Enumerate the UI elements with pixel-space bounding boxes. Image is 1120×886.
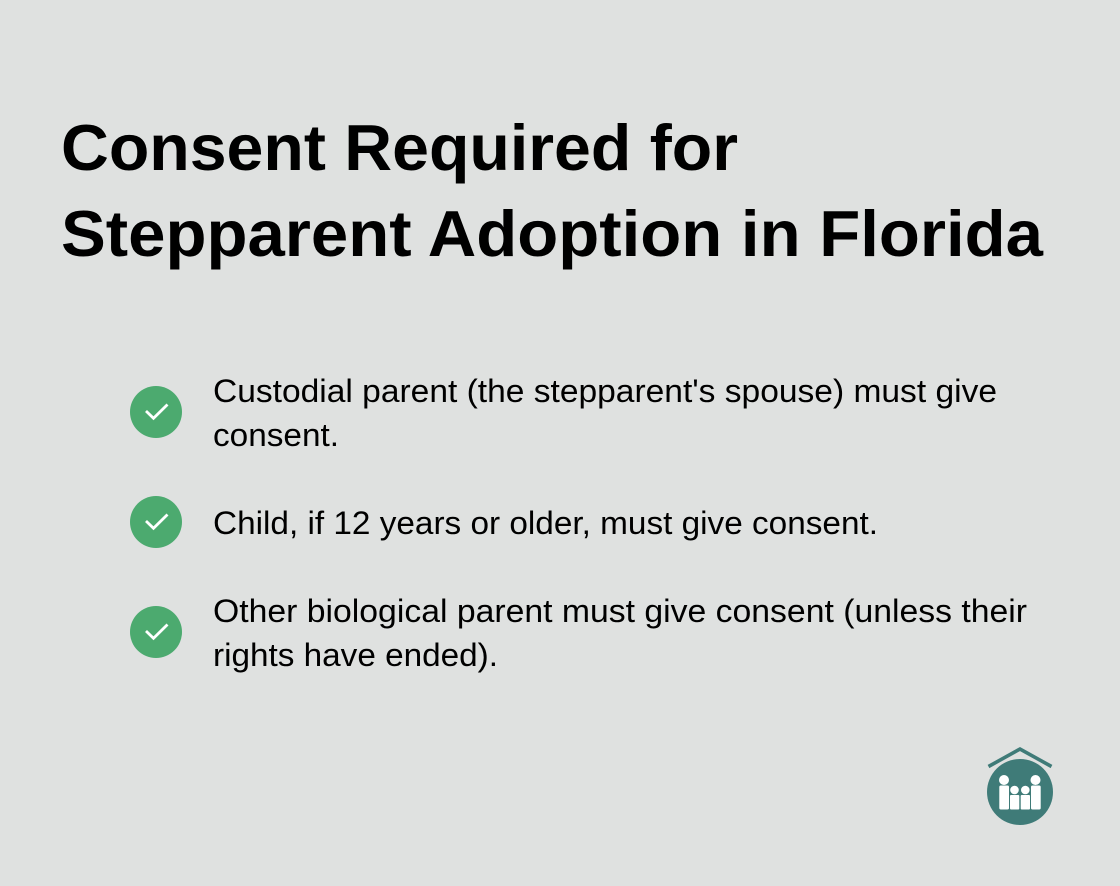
logo roof (988, 749, 1052, 766)
list item: child (130, 496, 878, 548)
text: custodial parent: consent. (213, 417, 339, 453)
text: custodial parent (213, 373, 997, 453)
text: other biological parent: Other biological parent must give consent (unless their (213, 593, 1027, 629)
list item: other biological parent (130, 593, 1027, 673)
icon: check mark 1 (130, 386, 182, 438)
title (61, 111, 1044, 270)
title: Stepparent Adoption in Florida (61, 197, 1044, 270)
logo: family in house (987, 749, 1053, 825)
text: child: Child, if 12 years or older, must give consent. (213, 505, 878, 541)
text: other biological parent (213, 593, 1027, 673)
text: other biological parent: rights have ended). (213, 637, 498, 673)
text: custodial parent: Custodial parent (the stepparent's spouse) must give (213, 373, 997, 409)
icon: check mark 2 (130, 496, 182, 548)
logo figures (999, 775, 1041, 810)
title: Consent Required for (61, 111, 738, 184)
icon: check mark 3 (130, 606, 182, 658)
logo circle (987, 759, 1053, 825)
list item: custodial parent (130, 373, 997, 453)
